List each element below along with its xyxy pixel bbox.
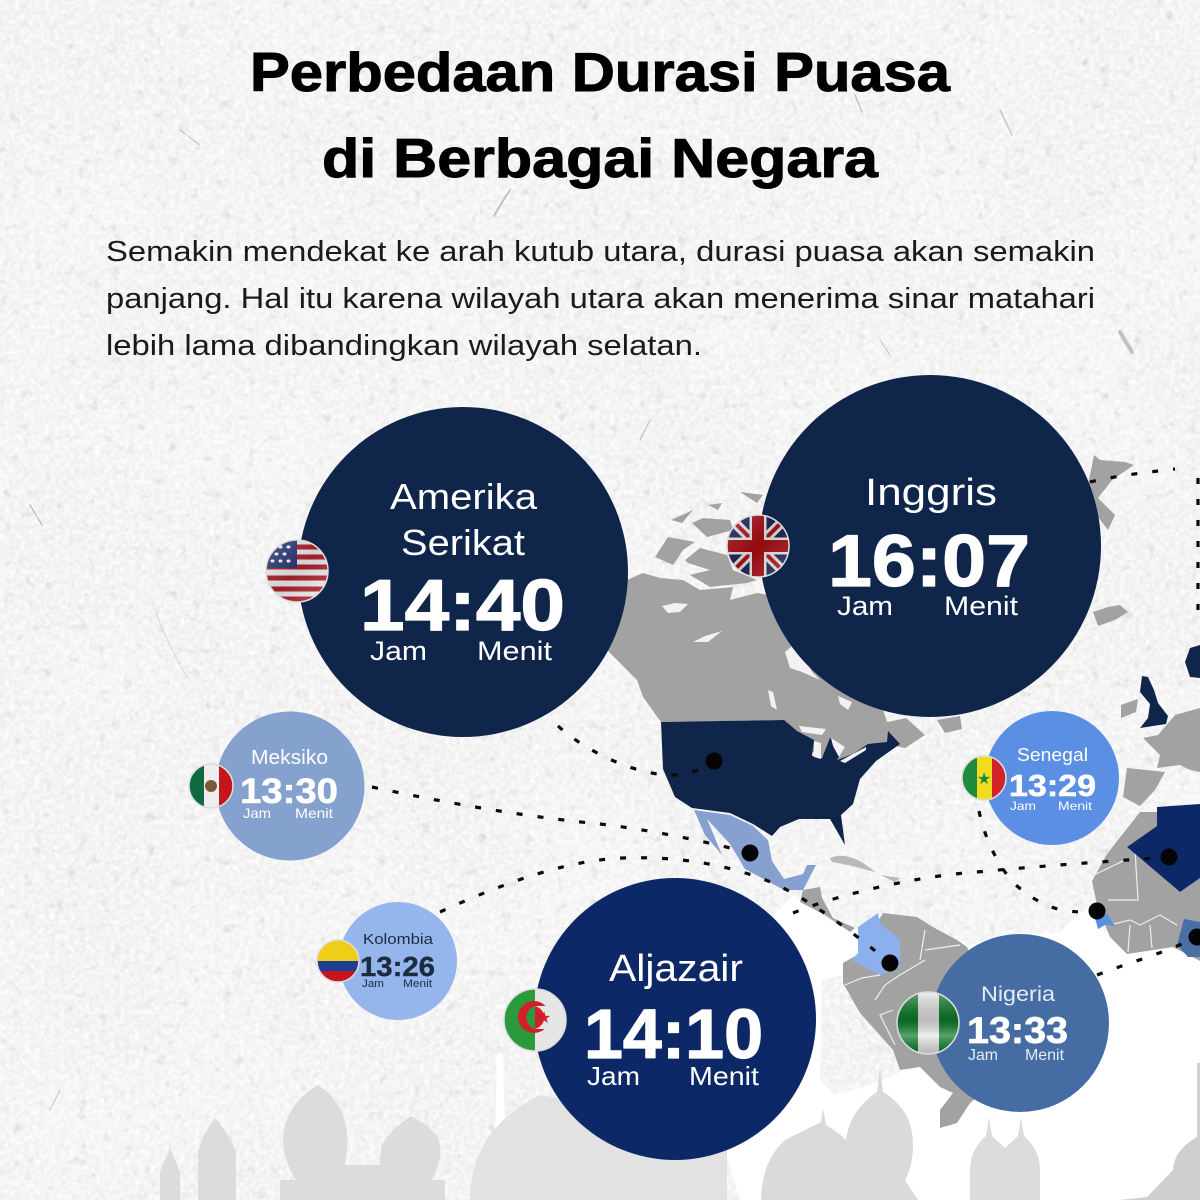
panel: aljazair: Menit	[689, 1061, 760, 1091]
panel: inggris: Inggris	[865, 472, 997, 514]
icon: uk flag	[727, 515, 789, 577]
panel: amerika serikat: Serikat	[401, 522, 525, 563]
icon: colombia flag	[317, 940, 359, 982]
panel: aljazair: 14:10	[584, 995, 763, 1073]
panel: kolombia: 13:26	[360, 951, 435, 982]
panel: amerika serikat: Amerika	[390, 476, 538, 517]
map: canadian arctic islands	[655, 492, 763, 587]
map: africa borders	[1092, 850, 1177, 952]
panel: inggris: 16:07	[828, 521, 1030, 602]
map: colombia	[852, 913, 900, 975]
icon: senegal flag	[962, 756, 1007, 800]
panel: nigeria: Nigeria	[981, 983, 1055, 1006]
white mosque spire	[495, 1053, 505, 1135]
dotted connector lines	[372, 469, 1198, 975]
panel: nigeria: Menit	[1025, 1047, 1065, 1064]
panel: kolombia: Jam	[362, 978, 384, 990]
panel: amerika serikat: Menit	[477, 636, 553, 666]
panel: kolombia	[317, 902, 457, 1020]
intro paragraph: panjang. Hal itu karena wilayah utara akan menerima sinar matahari	[106, 283, 1095, 315]
intro paragraph: lebih lama dibandingkan wilayah selatan.	[106, 330, 702, 362]
map: south america	[843, 913, 985, 1128]
map: europe	[1143, 708, 1200, 772]
panel: inggris	[727, 375, 1101, 717]
panel: inggris: Jam	[837, 591, 893, 621]
map: south america borders	[845, 930, 960, 1045]
panel: meksiko	[189, 712, 364, 860]
panel: amerika serikat	[266, 407, 628, 737]
map: iceland	[1093, 605, 1128, 626]
map: atlantic canada	[937, 716, 962, 733]
panel: meksiko: Jam	[243, 805, 271, 821]
panel: aljazair: Jam	[587, 1061, 640, 1091]
panel: aljazair: Aljazair	[609, 948, 743, 990]
panel: senegal	[962, 711, 1119, 845]
panel: meksiko: Menit	[295, 805, 333, 821]
intro paragraph	[106, 236, 1095, 362]
panel: aljazair	[504, 878, 816, 1160]
title	[250, 41, 950, 189]
map: central america	[800, 887, 855, 932]
icon: senegal flag: ★	[977, 771, 991, 788]
map: great lakes	[799, 726, 866, 763]
map: caribbean	[830, 856, 900, 882]
map: mexico	[694, 810, 816, 890]
map: algeria	[1127, 804, 1200, 892]
title: Perbedaan Durasi Puasa	[250, 41, 950, 103]
icon: algeria flag: ★	[537, 1010, 551, 1027]
map: senegal	[1095, 914, 1115, 929]
panel: inggris: Menit	[944, 591, 1019, 621]
map: nigeria	[1177, 919, 1200, 957]
map: hudson bay	[785, 642, 852, 710]
icon: algeria flag	[504, 989, 566, 1051]
map: canada mainland	[607, 573, 906, 765]
icon: nigeria flag	[897, 992, 959, 1054]
map: britain	[1140, 676, 1168, 728]
map: greenland	[1085, 455, 1134, 530]
map: iberia	[1123, 768, 1165, 806]
panel: senegal: Menit	[1058, 799, 1093, 813]
left mosque	[160, 1085, 445, 1200]
mosque silhouette	[160, 1063, 1200, 1200]
panel: meksiko: 13:30	[240, 772, 338, 811]
central large dome	[470, 1095, 727, 1200]
panel: meksiko: Meksiko	[251, 747, 328, 769]
location dots	[706, 752, 1200, 972]
map: ireland	[1121, 699, 1138, 718]
panel: kolombia: Menit	[403, 978, 432, 990]
panel: nigeria: Jam	[968, 1047, 998, 1064]
map: scandinavia	[1185, 645, 1200, 678]
icon: us flag	[266, 540, 328, 602]
title: di Berbagai Negara	[322, 127, 878, 189]
world map	[607, 455, 1200, 1128]
map: africa	[1092, 812, 1200, 961]
map: canadian lakes	[662, 603, 777, 710]
intro paragraph: Semakin mendekat ke arah kutub utara, durasi puasa akan semakin	[106, 236, 1095, 268]
far right dome	[1120, 1063, 1200, 1200]
panel: nigeria	[897, 934, 1109, 1112]
icon: mexico flag	[189, 764, 234, 808]
white backdrop silhouette	[725, 895, 1200, 1200]
right mosque	[761, 1067, 918, 1200]
twin domes	[970, 1117, 1040, 1200]
panel: senegal: 13:29	[1009, 768, 1096, 803]
panel: amerika serikat: Jam	[370, 636, 427, 666]
panel: nigeria: 13:33	[967, 1010, 1068, 1051]
panel: senegal: Jam	[1010, 799, 1036, 813]
map: united states	[661, 720, 900, 845]
panel: amerika serikat: 14:40	[360, 566, 565, 646]
panel: senegal: Senegal	[1017, 745, 1088, 765]
panel: kolombia: Kolombia	[363, 931, 434, 948]
